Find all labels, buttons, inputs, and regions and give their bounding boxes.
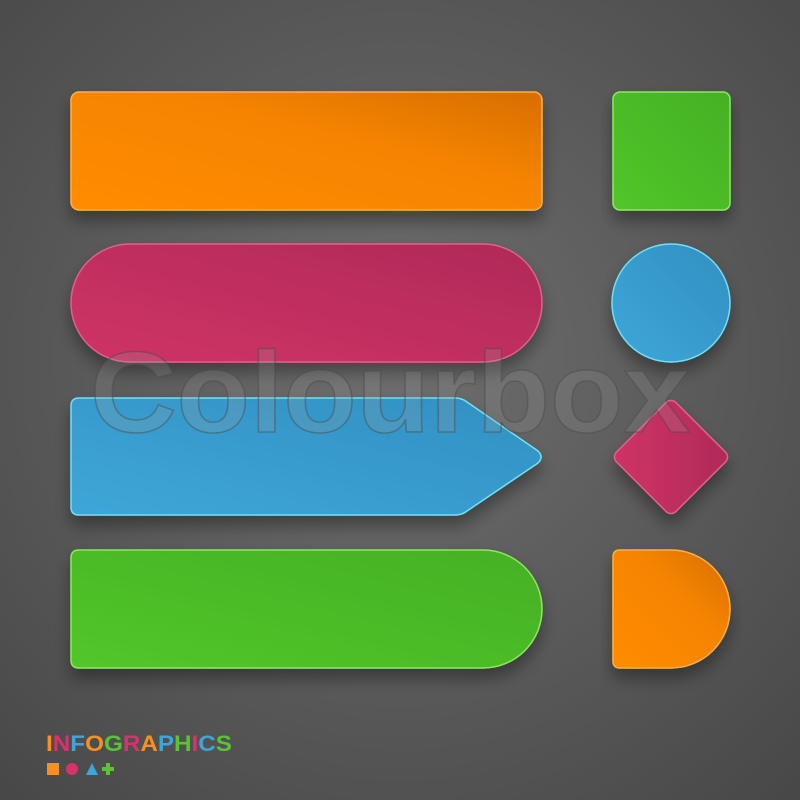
logo shapes	[47, 763, 114, 775]
watermark: Colourbox	[90, 329, 690, 457]
label: green tab	[71, 550, 542, 668]
logo: INFOGRAPHICS: INFOGRAPHICS	[46, 731, 232, 756]
label: pink pill	[71, 244, 542, 362]
label: orange rectangle	[71, 92, 542, 210]
icon: pink diamond	[612, 398, 730, 516]
logo: INFOGRAPHICS	[46, 731, 232, 775]
icon: orange D	[613, 550, 730, 668]
label: blue arrow	[71, 398, 541, 515]
icon: blue circle	[612, 244, 730, 362]
icon: green square	[613, 92, 730, 210]
